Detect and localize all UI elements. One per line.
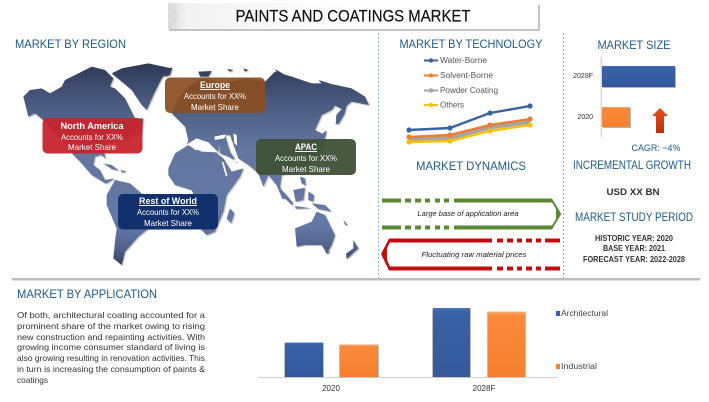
study period details: BASE YEAR: 2021 — [603, 243, 665, 253]
study period details — [583, 233, 685, 264]
study period details: FORECAST YEAR: 2022-2028 — [583, 254, 685, 264]
line chart: technology — [406, 56, 533, 145]
study period details: HISTORIC YEAR: 2020 — [595, 233, 673, 243]
world map — [23, 63, 369, 265]
heading: market by region: MARKET BY REGION — [15, 37, 126, 51]
text block: application description: also growing resulting in renovation activities. This — [17, 354, 205, 363]
dashed and solid dividers — [12, 33, 700, 280]
callout: europe: Europe — [200, 80, 230, 91]
callout: apac — [256, 139, 356, 175]
callout: north america: Market Share — [68, 142, 116, 152]
text block: application description: Of both, architectural coating accounted for a — [17, 311, 206, 320]
callout: north america: Accounts for XX% — [61, 132, 123, 142]
callout: rest of world: Market Share — [144, 218, 192, 228]
heading: market by technology: MARKET BY TECHNOLOGY — [400, 37, 542, 51]
legend: technology: Powder Coating — [440, 86, 498, 95]
legend: technology: Water-Borne — [440, 56, 488, 65]
callout: europe — [165, 78, 265, 113]
title banner: PAINTS AND COATINGS MARKET — [236, 8, 470, 26]
arrow: growth — [652, 108, 668, 133]
bar chart: market size: 2028F — [573, 73, 593, 80]
callout: rest of world — [118, 194, 218, 230]
title banner — [168, 3, 540, 31]
text block: application description: prominent share of the market owing to rising — [17, 322, 205, 331]
bar chart: market size — [573, 57, 676, 137]
bar chart: application: 2020 — [322, 384, 340, 393]
legend: application: Industrial — [561, 362, 597, 371]
text block: application description: new construction and repainting activities. With — [17, 333, 205, 342]
bar chart: application — [258, 308, 558, 393]
text block: application description — [17, 311, 206, 385]
text block: application description: in turn is increasing the consumption of paints & — [17, 365, 206, 374]
bar chart: market size: 2020 — [577, 114, 593, 121]
text block: application description: growing income consumer standard of living is — [17, 343, 205, 352]
callout: rest of world: Accounts for XX% — [137, 207, 199, 217]
legend: application — [556, 309, 608, 371]
restraint arrow: red: Fluctuating raw material prices — [422, 250, 527, 259]
legend: technology: Others — [440, 100, 464, 110]
heading: market size: MARKET SIZE — [598, 38, 670, 52]
legend: technology — [424, 56, 498, 110]
callout: north america — [42, 118, 142, 154]
heading: market by application: MARKET BY APPLICATION — [17, 287, 157, 301]
driver arrow: green: Large base of application area — [418, 209, 518, 218]
cagr label: CAGR: ~4% — [632, 143, 680, 153]
callout: apac: APAC — [295, 142, 317, 153]
callout: apac: Market Share — [282, 164, 330, 174]
value: incremental growth: USD XX BN — [606, 187, 660, 198]
legend: technology: Solvent-Borne — [440, 71, 494, 80]
callout: apac: Accounts for XX% — [275, 153, 337, 163]
callout: europe: Market Share — [191, 102, 239, 112]
callout: europe: Accounts for XX% — [184, 91, 246, 101]
text block: application description: coatings — [17, 376, 48, 385]
driver arrow: green — [382, 198, 561, 230]
restraint arrow: red — [381, 238, 560, 270]
heading: market dynamics: MARKET DYNAMICS — [416, 159, 526, 173]
bar chart: application: 2028F — [473, 384, 495, 393]
callout: rest of world: Rest of World — [139, 196, 197, 207]
legend: application: Architectural — [561, 309, 608, 318]
callout: north america: North America — [60, 121, 124, 132]
